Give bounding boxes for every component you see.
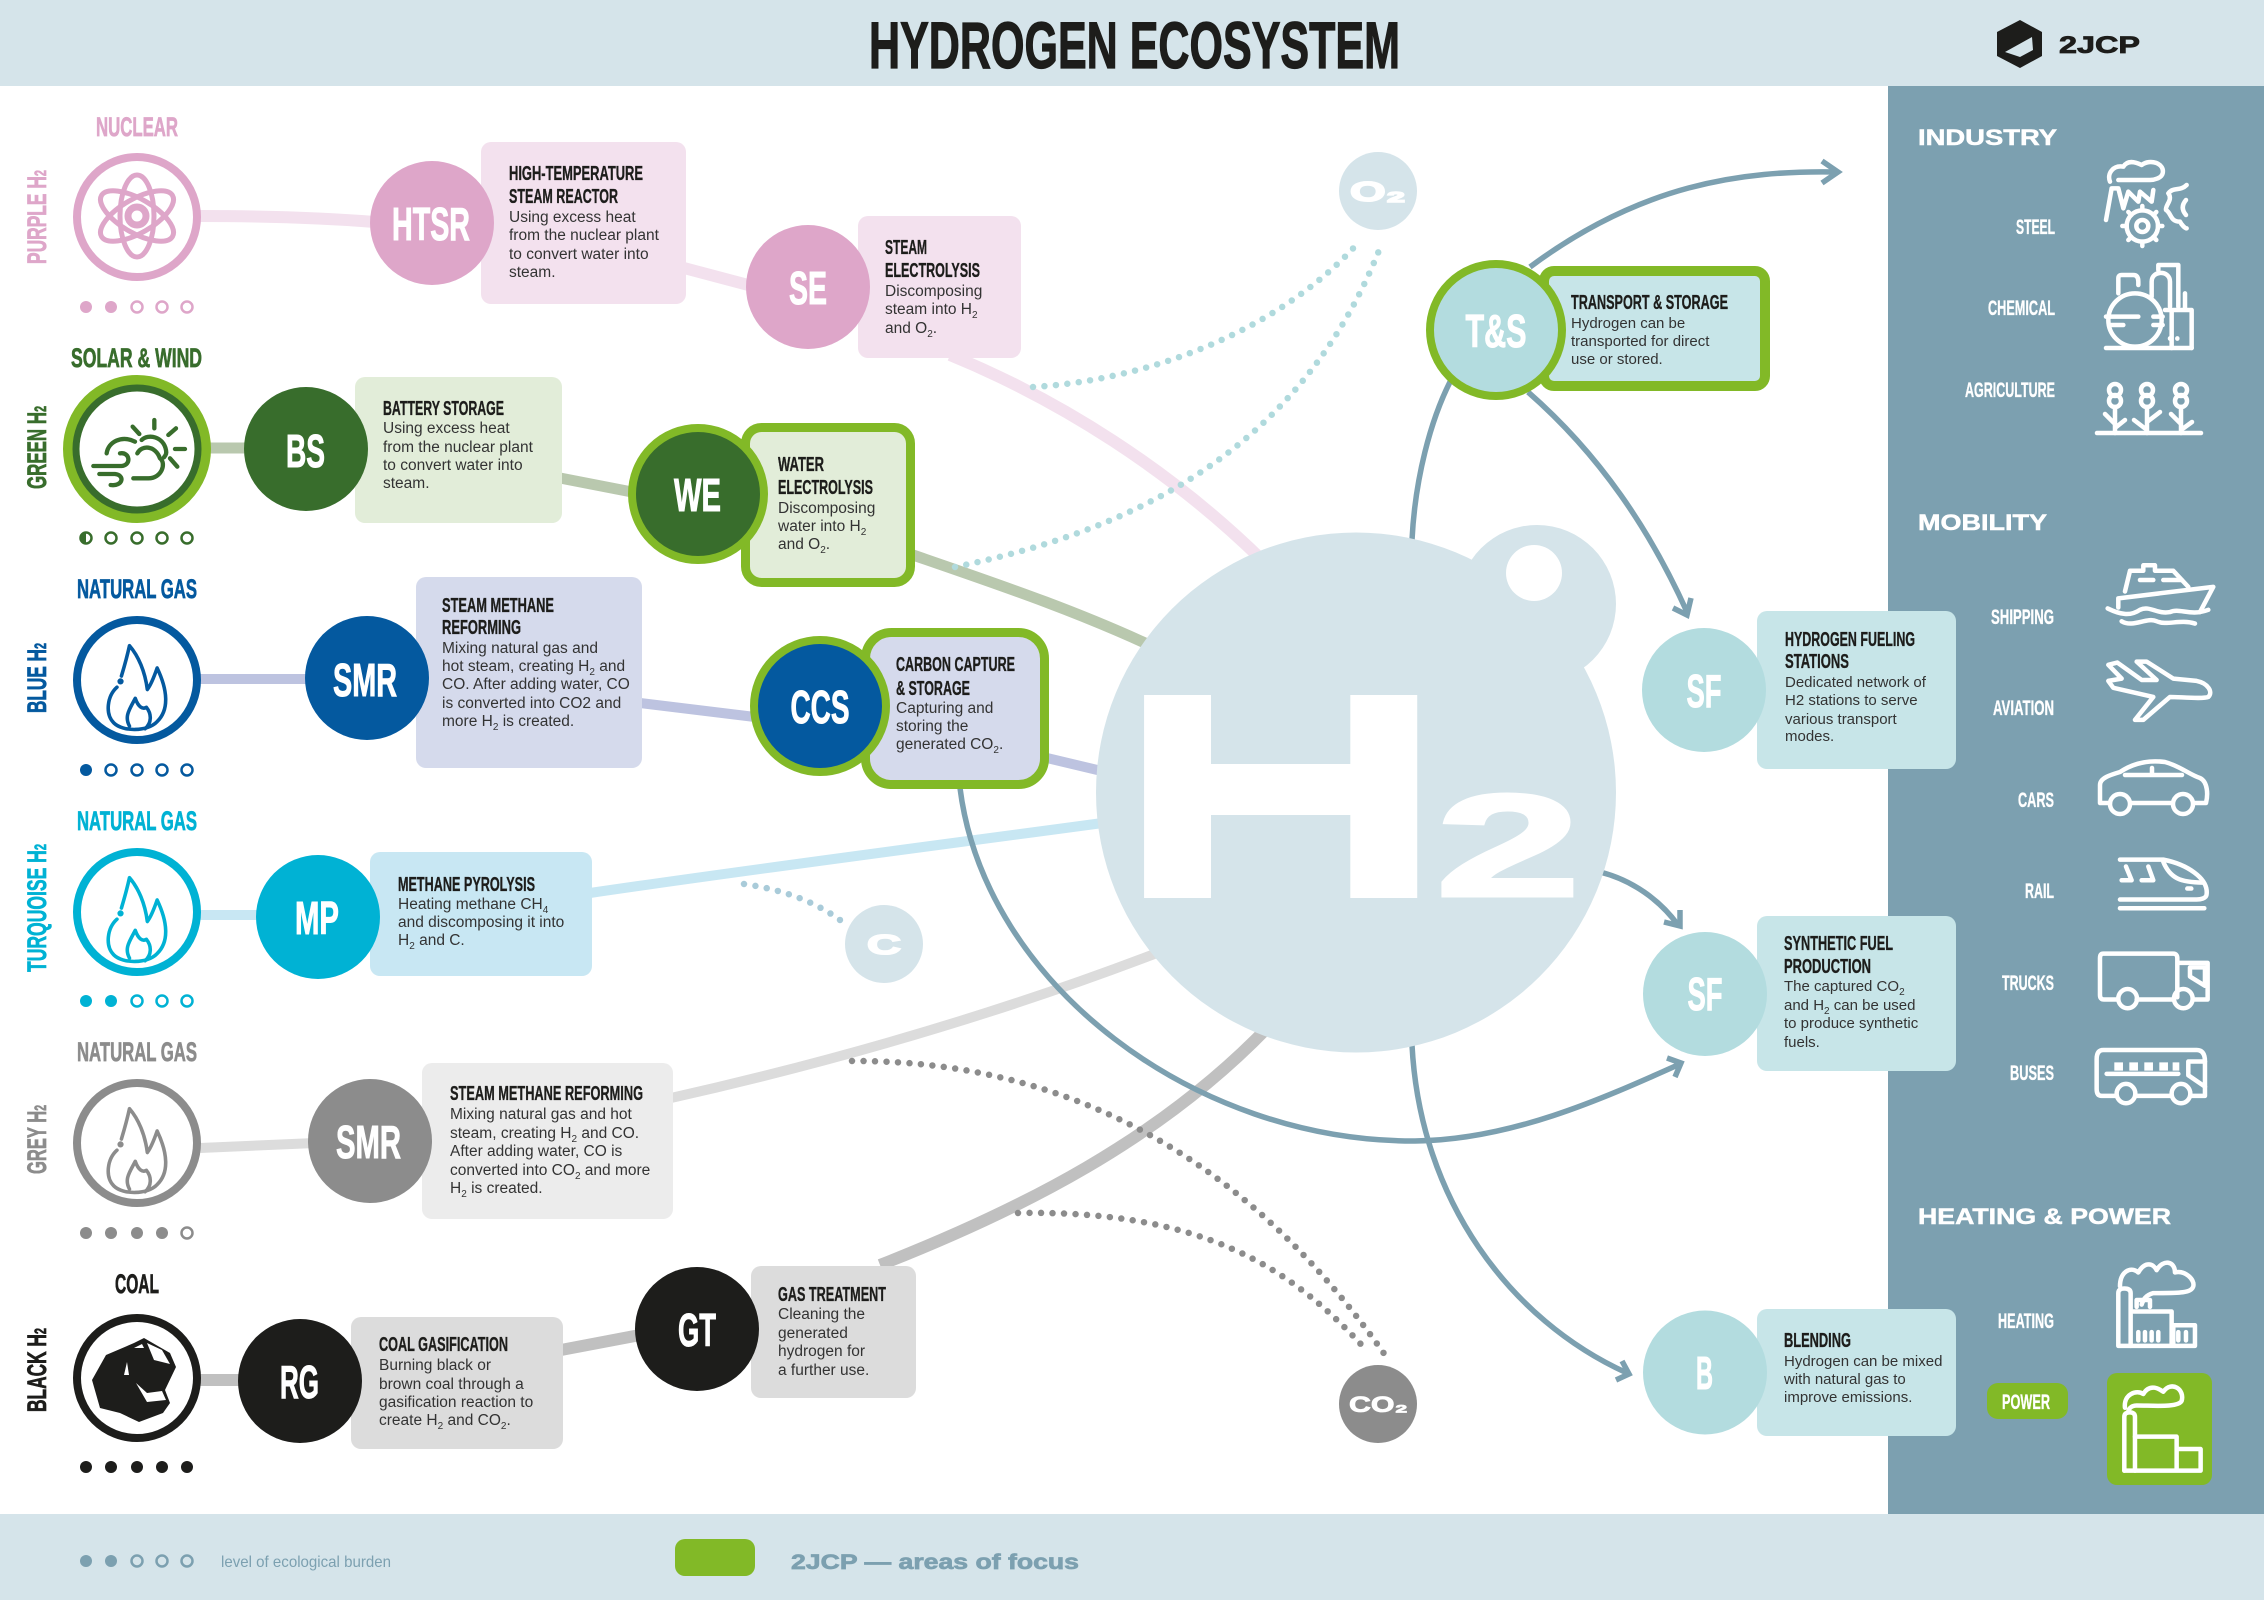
process box: high-temperature steam reactor: STEAM REACTOR	[509, 186, 618, 208]
process box: steam methane reforming (grey): and more	[580, 1162, 650, 1179]
burden dots	[80, 764, 192, 776]
source heading: coal: COAL	[115, 1269, 159, 1299]
label: agriculture: AGRICULTURE	[1965, 379, 2055, 402]
process box: methane pyrolysis: METHANE PYROLYSIS	[398, 874, 535, 896]
node: SMR blue: SMR	[333, 654, 397, 706]
process box: synthetic fuel production	[1757, 916, 1956, 1071]
process box: steam methane reforming (blue): REFORMING	[442, 617, 521, 639]
node: SF synthetic: SF	[1688, 968, 1722, 1020]
process box: synthetic fuel production: PRODUCTION	[1784, 956, 1871, 978]
process box: hydrogen fueling stations: various transport	[1785, 711, 1898, 728]
process box: water electrolysis: 2	[820, 545, 826, 556]
process box: steam methane reforming (blue)	[416, 577, 642, 768]
label: chemical: CHEMICAL	[1988, 297, 2055, 320]
label: blue H2: BLUE H2	[22, 643, 52, 713]
process box: blending: BLENDING	[1784, 1330, 1851, 1352]
node: HTSR: HTSR	[392, 198, 470, 250]
connector lines: turquoise route	[200, 822, 1110, 915]
process box: steam methane reforming (grey): converted into CO	[450, 1162, 575, 1179]
process box: synthetic fuel production: 2	[1824, 1006, 1830, 1017]
icon: train	[2120, 860, 2207, 908]
process box: blending: improve emissions.	[1784, 1389, 1912, 1406]
process box: steam electrolysis: steam into H	[885, 301, 972, 318]
dotted line: CO2 from GT	[1018, 1213, 1368, 1352]
process box: battery storage: from the nuclear plant	[383, 439, 534, 456]
dotted line: CO2 from grey SMR	[852, 1061, 1385, 1355]
connector lines: blue route	[200, 679, 1110, 773]
process box: coal gasification: COAL GASIFICATION	[379, 1334, 508, 1356]
row: purple hydrogen	[22, 112, 197, 313]
icon: chemical plant	[2106, 265, 2192, 348]
panel: end uses	[1888, 86, 2264, 1514]
process box: blending	[1757, 1309, 1956, 1436]
CO2 bubble	[1339, 1365, 1417, 1443]
carbon bubble	[845, 905, 923, 983]
arrow: T&S to fueling stations	[1528, 392, 1691, 615]
process box: water electrolysis	[746, 428, 910, 582]
legend: level of ecological burden: level of ecological burden	[221, 1554, 391, 1571]
process box: steam methane reforming (grey): 2	[461, 1189, 467, 1200]
burden dots	[80, 1461, 193, 1473]
source heading: natural gas: NATURAL GAS	[77, 574, 197, 604]
node: SE	[746, 225, 870, 349]
node: WE	[632, 428, 764, 560]
process box: methane pyrolysis: and discomposing it into	[398, 914, 564, 931]
process box: carbon capture and storage	[866, 632, 1044, 784]
node: RG	[238, 1319, 362, 1443]
process box: steam methane reforming (blue): is converted into CO2 and	[442, 695, 621, 712]
process box: hydrogen fueling stations: Dedicated network of	[1785, 674, 1927, 691]
process box: steam electrolysis: 2	[927, 329, 933, 340]
process box: transport and storage: use or stored.	[1571, 351, 1663, 368]
node: GT	[635, 1267, 759, 1391]
process box: high-temperature steam reactor: to convert water into	[509, 246, 649, 263]
label: black H2: BLACK H2	[22, 1328, 52, 1412]
process box: steam methane reforming (grey): 2	[575, 1171, 581, 1182]
label: buses: BUSES	[2010, 1062, 2054, 1085]
process box: blending: with natural gas to	[1783, 1371, 1906, 1388]
process box: steam methane reforming (grey): After adding water, CO is	[450, 1143, 623, 1160]
process box: water electrolysis: ELECTROLYSIS	[778, 477, 873, 499]
process box: synthetic fuel production: can be used	[1830, 997, 1916, 1014]
process box: carbon capture and storage: Capturing and	[896, 700, 993, 717]
process box: steam methane reforming (grey): Mixing natural gas and hot	[450, 1106, 633, 1123]
source heading: nuclear: NUCLEAR	[96, 112, 178, 142]
process box: methane pyrolysis: 2	[409, 941, 415, 952]
process box: gas treatment	[751, 1266, 916, 1398]
carbon bubble: C	[867, 929, 901, 960]
process box: carbon capture and storage: storing the	[896, 718, 968, 735]
node: BS: BS	[286, 425, 325, 477]
label: purple H2: PURPLE H2	[22, 170, 52, 264]
header band	[0, 0, 2264, 86]
CO2 bubble: CO₂	[1349, 1392, 1408, 1417]
process box: gas treatment: GAS TREATMENT	[778, 1284, 886, 1306]
icon: car	[2100, 761, 2207, 814]
highlighted icon: power plant	[2107, 1373, 2212, 1485]
arrow: H2 to synthetic fuel	[1600, 872, 1680, 926]
icon: airplane	[2108, 662, 2210, 720]
process box: steam methane reforming (grey): is created.	[467, 1180, 543, 1197]
node: MP	[256, 855, 380, 979]
process box: high-temperature steam reactor	[481, 142, 686, 304]
arrow: T&S to industry	[1530, 161, 1838, 267]
process box: coal gasification: 2	[438, 1421, 444, 1432]
process box: steam methane reforming (grey): and CO.	[577, 1125, 639, 1142]
node: SF fueling: SF	[1686, 665, 1722, 717]
process box: carbon capture and storage: CARBON CAPTURE	[896, 654, 1015, 676]
process box: steam electrolysis: Discomposing	[885, 283, 982, 300]
logo: 2JCP	[1997, 20, 2140, 68]
process box: methane pyrolysis: and C.	[415, 932, 465, 949]
process box: methane pyrolysis: Heating methane CH	[398, 896, 543, 913]
process box: battery storage: to convert water into	[383, 457, 523, 474]
dotted line: oxygen from WE	[955, 248, 1380, 567]
connector lines: black route	[200, 1025, 1270, 1380]
process box: battery storage: Using excess heat	[383, 420, 510, 437]
label: grey H2: GREY H2	[22, 1105, 52, 1174]
title: HYDROGEN ECOSYSTEM	[869, 8, 1400, 82]
connector lines: grey route	[200, 948, 1170, 1148]
process box: steam methane reforming (blue): and	[595, 658, 625, 675]
process box: gas treatment: generated	[778, 1325, 848, 1342]
process box: transport and storage: transported for direct	[1571, 333, 1710, 350]
footer band	[0, 1514, 2264, 1600]
source heading: natural gas: NATURAL GAS	[77, 806, 197, 836]
label: rail: RAIL	[2025, 880, 2054, 903]
node: SMR grey: SMR	[336, 1116, 401, 1168]
icon: atom in ring	[77, 157, 197, 277]
process box: steam electrolysis	[858, 216, 1021, 358]
node: GT: GT	[678, 1304, 716, 1356]
label: heating: HEATING	[1998, 1310, 2054, 1333]
process box: high-temperature steam reactor: from the nuclear plant	[509, 227, 660, 244]
node: HTSR	[370, 161, 494, 285]
process box: coal gasification: create H	[379, 1412, 438, 1429]
icon: heating plant	[2118, 1263, 2195, 1346]
process box: carbon capture and storage: generated CO	[896, 736, 993, 753]
logo: 2JCP: 2JCP	[2059, 32, 2140, 59]
dotted line: oxygen from SE	[1033, 243, 1358, 387]
process box: methane pyrolysis: H	[398, 932, 409, 949]
process box: steam methane reforming (blue): CO. After adding water, CO	[442, 676, 630, 693]
icon: crops	[2097, 384, 2201, 433]
process box: steam methane reforming (blue): 2	[493, 722, 499, 733]
process box: hydrogen fueling stations: STATIONS	[1785, 651, 1849, 673]
process box: coal gasification: and CO	[443, 1412, 501, 1429]
node: CCS: CCS	[790, 681, 850, 733]
process box: blending: Hydrogen can be mixed	[1784, 1353, 1942, 1370]
legend: level of ecological burden	[80, 1554, 391, 1571]
process box: high-temperature steam reactor: HIGH-TEMPERATURE	[509, 163, 643, 185]
process box: hydrogen fueling stations: modes.	[1785, 728, 1834, 745]
process box: methane pyrolysis: 4	[543, 905, 549, 916]
connector lines: purple route	[200, 216, 1262, 560]
legend: areas of focus: 2JCP — areas of focus	[791, 1551, 1079, 1574]
highlighted label: power: POWER	[2002, 1391, 2050, 1414]
node: SMR grey	[308, 1079, 432, 1203]
process box: water electrolysis: and O	[778, 536, 820, 553]
process box: water electrolysis: 2	[861, 527, 867, 538]
process box: carbon capture and storage: 2	[993, 745, 999, 756]
process box: synthetic fuel production: fuels.	[1784, 1034, 1820, 1051]
process box: steam electrolysis: STEAM	[885, 237, 927, 259]
burden dots	[80, 301, 192, 313]
process box: battery storage	[355, 377, 562, 523]
node: T&S: T&S	[1466, 305, 1526, 357]
burden dots	[80, 532, 192, 544]
heading: heating and power: HEATING & POWER	[1918, 1204, 2171, 1229]
process box: methane pyrolysis	[370, 852, 592, 976]
process box: steam electrolysis: and O	[885, 320, 927, 337]
process box: coal gasification: Burning black or	[379, 1357, 491, 1374]
process box: steam methane reforming (blue): 2	[589, 667, 595, 678]
process box: hydrogen fueling stations: H2 stations to serve	[1785, 692, 1918, 709]
process box: battery storage: BATTERY STORAGE	[383, 398, 504, 420]
process box: synthetic fuel production: The captured CO	[1784, 978, 1899, 995]
process box: water electrolysis: .	[826, 536, 830, 553]
label: steel: STEEL	[2016, 216, 2055, 239]
heading: industry: INDUSTRY	[1918, 125, 2057, 150]
node: RG: RG	[280, 1356, 319, 1408]
oxygen bubble: O₂	[1350, 176, 1406, 207]
icon: flame in ring	[77, 1083, 197, 1203]
node: CCS	[754, 640, 886, 772]
heading: mobility: MOBILITY	[1918, 510, 2047, 535]
node: B: B	[1696, 1347, 1713, 1399]
central hydrogen molecule	[1096, 525, 1616, 1052]
row: green hydrogen	[22, 343, 206, 544]
process box: carbon capture and storage: & STORAGE	[896, 678, 970, 700]
row: grey hydrogen	[22, 1037, 197, 1239]
node: SF synthetic	[1643, 932, 1767, 1056]
label: aviation: AVIATION	[1993, 697, 2054, 720]
node: SMR blue	[305, 616, 429, 740]
node: WE: WE	[674, 469, 721, 521]
legend: areas of focus	[675, 1539, 1079, 1576]
source heading: natural gas: NATURAL GAS	[77, 1037, 197, 1067]
process box: steam methane reforming (blue): STEAM METHANE	[442, 595, 554, 617]
line: H2 to T&S	[1412, 378, 1452, 540]
burden dots	[80, 1227, 192, 1239]
process box: synthetic fuel production: to produce synthetic	[1784, 1015, 1919, 1032]
process box: carbon capture and storage: .	[999, 736, 1003, 753]
row: turquoise hydrogen	[22, 806, 197, 1007]
node: B	[1643, 1310, 1767, 1434]
central hydrogen molecule: 2	[1435, 765, 1581, 928]
process box: steam methane reforming (blue): is created.	[498, 713, 574, 730]
process box: coal gasification: brown coal through a	[379, 1376, 524, 1393]
process box: steam methane reforming (blue): hot steam, creating H	[442, 658, 589, 675]
node: BS	[244, 387, 368, 511]
dotted line: carbon from MP	[744, 884, 840, 920]
process box: steam electrolysis: 2	[972, 310, 978, 321]
highlighted label: power	[1987, 1383, 2068, 1419]
process box: steam methane reforming (grey)	[422, 1063, 673, 1219]
label: turquoise H2: TURQUOISE H2	[22, 844, 52, 972]
node: SF fueling	[1642, 628, 1766, 752]
node: T&S	[1430, 264, 1562, 396]
process box: transport and storage: Hydrogen can be	[1571, 315, 1685, 332]
burden dots	[80, 995, 192, 1007]
process box: transport and storage: TRANSPORT & STORAGE	[1571, 292, 1728, 314]
process box: hydrogen fueling stations	[1757, 611, 1956, 769]
process box: steam methane reforming (grey): steam, creating H	[450, 1125, 571, 1142]
process box: water electrolysis: Discomposing	[778, 500, 875, 517]
process box: coal gasification: gasification reaction to	[379, 1394, 533, 1411]
process box: synthetic fuel production: SYNTHETIC FUEL	[1784, 933, 1893, 955]
arrow: CCS to synthetic fuel	[960, 788, 1681, 1141]
process box: synthetic fuel production: and H	[1784, 997, 1824, 1014]
oxygen bubble	[1339, 152, 1417, 230]
icon: ship	[2108, 565, 2213, 624]
node: SE: SE	[789, 262, 827, 314]
process box: steam methane reforming (blue): Mixing natural gas and	[442, 640, 598, 657]
label: green H2: GREEN H2	[22, 406, 52, 489]
process box: steam electrolysis: .	[933, 320, 937, 337]
process box: transport and storage	[1544, 271, 1765, 386]
process box: coal gasification	[351, 1317, 563, 1449]
node: MP: MP	[295, 892, 339, 944]
process box: hydrogen fueling stations: HYDROGEN FUELING	[1785, 629, 1915, 651]
process box: high-temperature steam reactor: Using excess heat	[509, 209, 636, 226]
process box: battery storage: steam.	[383, 475, 430, 492]
process box: steam methane reforming (grey): 2	[571, 1134, 577, 1145]
label: trucks: TRUCKS	[2002, 972, 2054, 995]
connector lines: green route	[208, 448, 1160, 650]
icon: truck	[2100, 954, 2208, 1008]
label: cars: CARS	[2018, 789, 2054, 812]
process box: gas treatment: a further use.	[778, 1362, 869, 1379]
row: blue hydrogen	[22, 574, 197, 776]
process box: coal gasification: .	[506, 1412, 511, 1429]
process box: steam methane reforming (grey): H	[450, 1180, 461, 1197]
icon: steel factory and gears	[2106, 162, 2187, 246]
icon: flame in ring	[77, 852, 197, 972]
central hydrogen molecule: H	[1113, 632, 1449, 961]
label: shipping: SHIPPING	[1991, 606, 2054, 629]
source heading: solar and wind: SOLAR & WIND	[71, 343, 202, 373]
process box: water electrolysis: WATER	[778, 454, 824, 476]
process box: water electrolysis: water into H	[778, 518, 861, 535]
process box: gas treatment: Cleaning the	[778, 1306, 865, 1323]
process box: high-temperature steam reactor: steam.	[509, 264, 556, 281]
icon: flame in ring	[77, 620, 197, 740]
process box: synthetic fuel production: 2	[1899, 987, 1905, 998]
icon: sun, cloud and wind in ring	[68, 380, 206, 518]
icon: bus	[2097, 1050, 2205, 1103]
arrow: H2 to blending	[1412, 1045, 1629, 1380]
process box: steam electrolysis: ELECTROLYSIS	[885, 260, 980, 282]
process box: gas treatment: hydrogen for	[778, 1343, 865, 1360]
row: black hydrogen	[22, 1269, 197, 1473]
process box: steam methane reforming (grey): STEAM METHANE REFORMING	[450, 1083, 643, 1105]
process box: coal gasification: 2	[501, 1421, 507, 1432]
icon: coal lump in ring	[77, 1318, 197, 1438]
process box: steam methane reforming (blue): more H	[442, 713, 493, 730]
